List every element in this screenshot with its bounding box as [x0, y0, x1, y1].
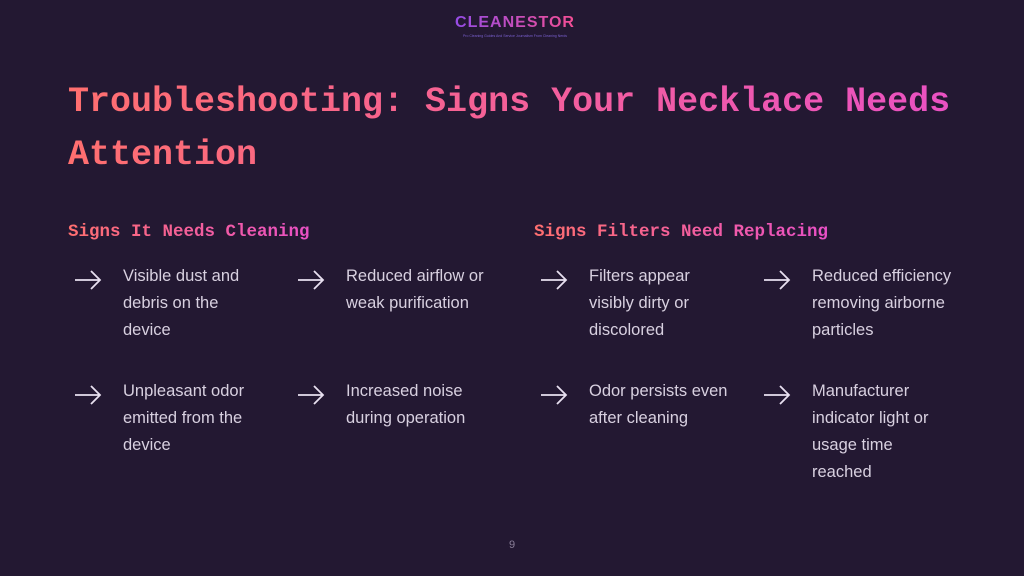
text: Unpleasant odor: [123, 382, 244, 400]
text: Reduced efficiency: [812, 267, 951, 285]
text: visibly dirty or: [589, 294, 689, 312]
text: weak purification: [346, 294, 469, 312]
heading: cleaning: Signs It Needs Cleaning: [68, 222, 310, 242]
text: debris on the: [123, 294, 218, 312]
text: particles: [812, 321, 873, 339]
logo: Pro Cleaning Guides And Service Journalism From Cleaning Nerds: [463, 34, 567, 38]
title: Troubleshooting: Signs Your Necklace Needs Attention: [68, 82, 950, 175]
text: reached: [812, 463, 872, 481]
text: device: [123, 436, 171, 454]
text: device: [123, 321, 171, 339]
heading: filters: Signs Filters Need Replacing: [534, 222, 828, 242]
text: during operation: [346, 409, 465, 427]
text: removing airborne: [812, 294, 945, 312]
text: Manufacturer: [812, 382, 909, 400]
text: Increased noise: [346, 382, 462, 400]
item: dirty filters: [541, 267, 690, 339]
item: odor: [75, 382, 244, 454]
text: emitted from the: [123, 409, 242, 427]
text: indicator light or: [812, 409, 928, 427]
text: usage time: [812, 436, 893, 454]
item: airflow: [298, 267, 484, 312]
text: Reduced airflow or: [346, 267, 484, 285]
page number: 9: [509, 539, 515, 551]
item: indicator: [764, 382, 928, 481]
item: dust: [75, 267, 239, 339]
text: Odor persists even: [589, 382, 727, 400]
item: efficiency: [764, 267, 952, 339]
logo: CLEANESTOR: [455, 14, 575, 31]
text: discolored: [589, 321, 664, 339]
text: after cleaning: [589, 409, 688, 427]
item: noise: [298, 382, 465, 427]
text: Filters appear: [589, 267, 690, 285]
text: Visible dust and: [123, 267, 239, 285]
item: odor persists: [541, 382, 727, 427]
